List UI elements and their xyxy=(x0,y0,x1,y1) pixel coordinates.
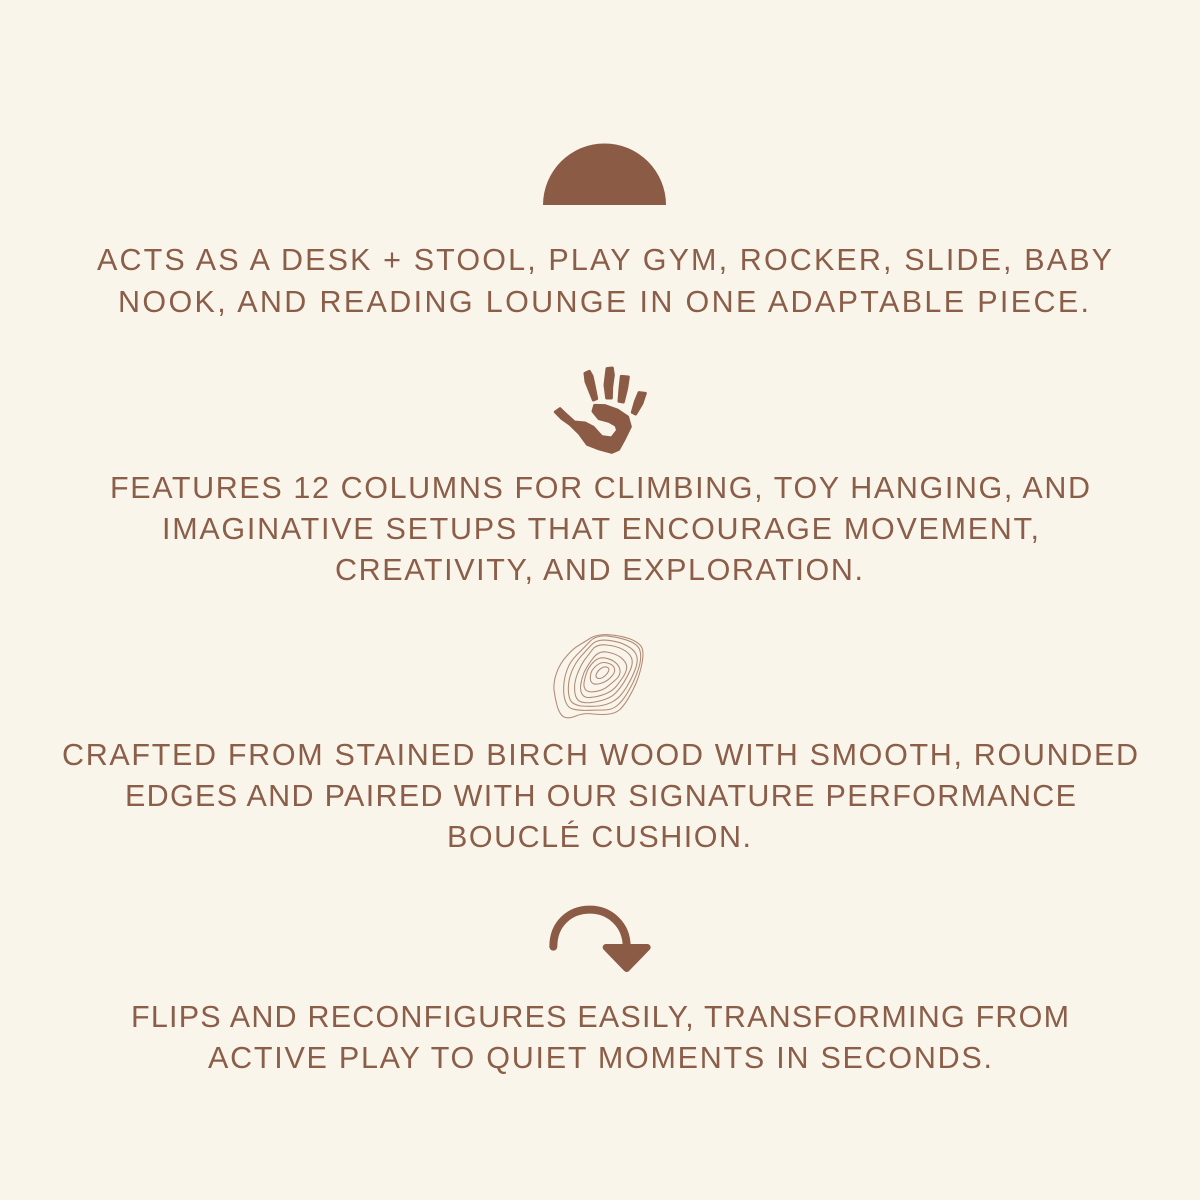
icon: curved arrow xyxy=(553,910,647,969)
text block: reconfigures xyxy=(131,1000,1069,1075)
text block: multifunction: NOOK, AND READING LOUNGE IN ONE ADAPTABLE PIECE. xyxy=(118,285,1089,319)
text block: twelve columns: CREATIVITY, AND EXPLORATION. xyxy=(335,553,863,587)
text block: twelve columns: FEATURES 12 COLUMNS FOR CLIMBING, TOY HANGING, AND xyxy=(110,471,1090,505)
icon: wood rings xyxy=(554,635,643,718)
text block: twelve columns xyxy=(110,471,1090,587)
text block: reconfigures: ACTIVE PLAY TO QUIET MOMENTS IN SECONDS. xyxy=(208,1041,992,1075)
text block: materials: BOUCLÉ CUSHION. xyxy=(447,819,751,854)
text block: materials: CRAFTED FROM STAINED BIRCH WOOD WITH SMOOTH, ROUNDED xyxy=(62,738,1138,772)
text block: multifunction: ACTS AS A DESK + STOOL, PLAY GYM, ROCKER, SLIDE, BABY xyxy=(97,243,1112,277)
text block: twelve columns: IMAGINATIVE SETUPS THAT ENCOURAGE MOVEMENT, xyxy=(162,512,1039,546)
text block: materials xyxy=(62,738,1138,854)
icon: handprint xyxy=(555,368,645,452)
text block: reconfigures: FLIPS AND RECONFIGURES EASILY, TRANSFORMING FROM xyxy=(131,1000,1069,1034)
text block: multifunction xyxy=(97,243,1112,319)
text block: materials: EDGES AND PAIRED WITH OUR SIGNATURE PERFORMANCE xyxy=(125,779,1076,813)
icon: half circle xyxy=(543,144,666,205)
